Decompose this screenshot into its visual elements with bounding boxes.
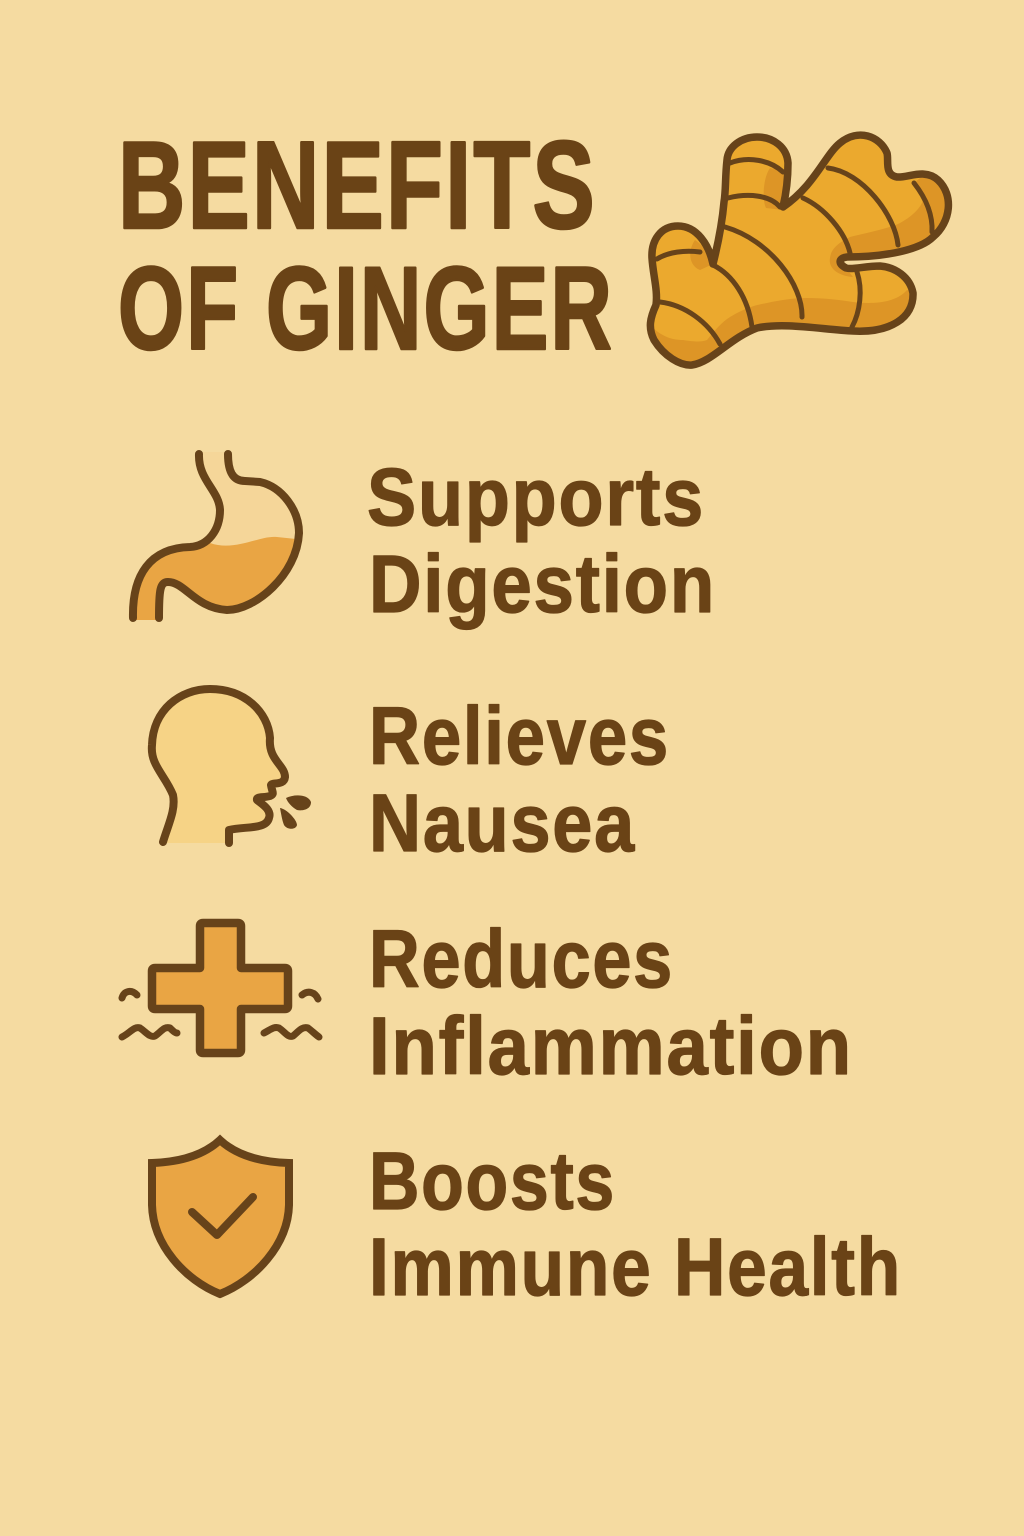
label: reduces inflammation [369,914,853,1092]
icon: head with nausea [152,689,311,843]
label: boosts immune health: Immune Health [369,1222,902,1313]
label: reduces inflammation: Reduces [369,914,674,1005]
title: OF GINGER [118,243,614,375]
label: supports digestion: Digestion [369,539,716,630]
title: BENEFITS [118,117,597,255]
icon: ginger root [650,135,948,365]
ginger shading [651,168,948,365]
label: relieves nausea: Nausea [369,778,636,869]
label: relieves nausea [369,691,670,869]
ginger outline and ridges [650,135,948,365]
label: relieves nausea: Relieves [369,691,670,782]
title [118,117,614,375]
icon: shield with check [152,1140,289,1294]
icon: stomach [133,452,299,620]
label: boosts immune health: Boosts [369,1136,616,1227]
nausea droplets [280,795,311,829]
label: reduces inflammation: Inflammation [369,1001,853,1092]
label: supports digestion: Supports [367,452,705,543]
label: supports digestion [367,452,716,630]
label: boosts immune health [369,1136,902,1313]
icon: medical cross with swelling lines [122,923,319,1053]
